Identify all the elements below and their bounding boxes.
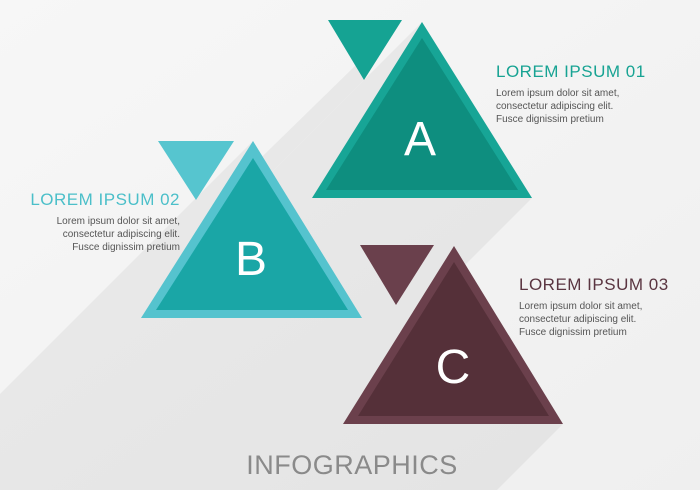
text block 03: consectetur adipiscing elit.: [519, 314, 636, 325]
text block 03: Lorem ipsum dolor sit amet,: [519, 301, 642, 312]
text block 01: [496, 62, 646, 125]
text block 01: Fusce dignissim pretium: [496, 114, 604, 125]
text block 03: LOREM IPSUM 03: [519, 275, 669, 294]
triangle C: [343, 245, 563, 424]
triangle A: A: [404, 113, 436, 166]
text block 02: Fusce dignissim pretium: [72, 242, 180, 253]
footer title: INFOGRAPHICS: [246, 450, 458, 480]
text block 01: LOREM IPSUM 01: [496, 62, 646, 81]
text block 02: consectetur adipiscing elit.: [63, 229, 180, 240]
shadows: [0, 20, 563, 490]
triangle C: C: [436, 341, 470, 394]
text block 01: Lorem ipsum dolor sit amet,: [496, 88, 619, 99]
text block 02: LOREM IPSUM 02: [30, 190, 180, 209]
text block 03: [519, 275, 669, 338]
text block 01: consectetur adipiscing elit.: [496, 101, 613, 112]
triangle B: [141, 141, 362, 318]
triangle B: B: [235, 233, 267, 286]
text block 03: Fusce dignissim pretium: [519, 327, 627, 338]
text block 02: Lorem ipsum dolor sit amet,: [57, 216, 180, 227]
text block 02: [30, 190, 180, 253]
triangle A: [312, 20, 532, 198]
